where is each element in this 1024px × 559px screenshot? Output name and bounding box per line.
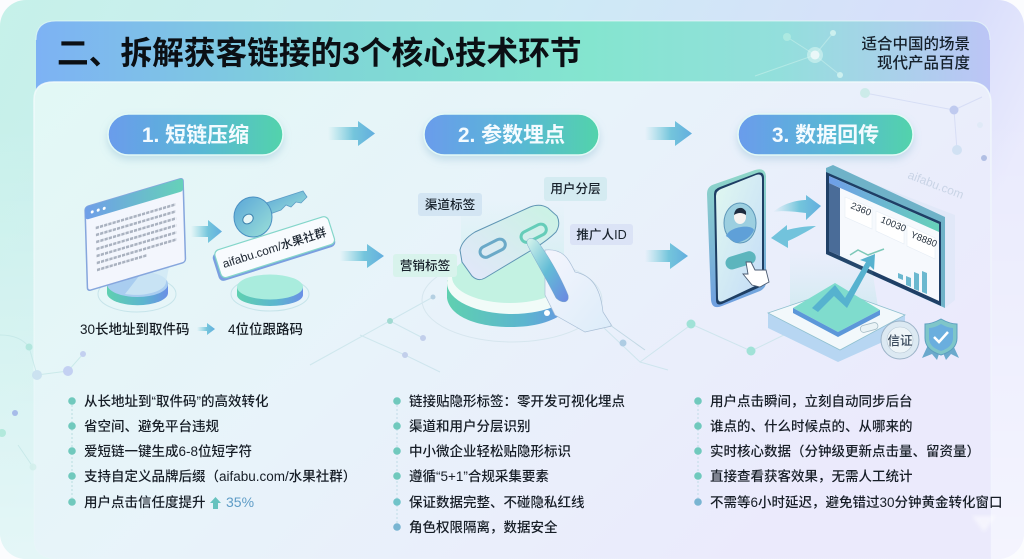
arrow: step 1 to step 2 illustration bbox=[340, 244, 384, 268]
step 1 pill bbox=[108, 114, 283, 155]
tag: channel bbox=[418, 193, 482, 216]
step 3 pill: 3. 数据回传 bbox=[772, 124, 879, 147]
bullet item 3: 中小微企业轻松贴隐形标识 bbox=[409, 443, 571, 459]
step 3 pill bbox=[738, 114, 913, 155]
icon: platform bbox=[422, 251, 602, 342]
list: column 3 bbox=[694, 393, 1003, 510]
tag: channel: 渠道标签 bbox=[425, 197, 476, 212]
bullet item 6: 角色权限隔离，数据安全 bbox=[409, 519, 558, 535]
main panel bbox=[34, 82, 991, 559]
bullet item 2: 省空间、避免平台违规 bbox=[84, 418, 219, 434]
bullet item 5: 不需等6小时延迟，避免错过30分钟黄金转化窗口 bbox=[710, 494, 1003, 510]
mini chart bbox=[850, 249, 927, 294]
hand cursor bbox=[743, 262, 769, 287]
illustration: parameter tagging bbox=[393, 177, 645, 350]
dashboard numbers bbox=[849, 201, 938, 250]
tag: user tier: 用户分层 bbox=[550, 181, 601, 196]
circuit lines across the middle bbox=[310, 294, 790, 372]
step 2 pill: 2. 参数埋点 bbox=[458, 123, 565, 147]
step 2 pill bbox=[424, 114, 599, 155]
small arrow bbox=[197, 323, 215, 335]
icon: short link pedestal bbox=[231, 274, 309, 311]
arrow 2 to 3 bbox=[645, 121, 692, 146]
icon: long url window bbox=[85, 178, 186, 291]
bullet item 5: 用户点击信任度提升 bbox=[84, 494, 206, 510]
light beam bbox=[461, 200, 564, 295]
icon: phone bbox=[707, 169, 769, 307]
title: 二、拆解获客链接的3个核心技术环节 bbox=[57, 35, 582, 71]
caption: long url to short code: 4位位跟路码 bbox=[228, 321, 303, 337]
bullet item 3: 爱短链一键生成6-8位短字符 bbox=[84, 443, 252, 459]
bullet item 2: 谁点的、什么时候点的、从哪来的 bbox=[710, 419, 912, 434]
arrow: step 2 to step 3 illustration bbox=[645, 243, 688, 269]
bullet item 4: 遵循“5+1”合规采集要素 bbox=[409, 468, 549, 484]
header note: 现代产品百度 bbox=[877, 54, 970, 72]
beam above base bbox=[790, 250, 880, 320]
dashboard numbers: 10030 bbox=[879, 215, 907, 235]
arrow 1 to 2 bbox=[328, 121, 375, 146]
icon: watermark diamond bbox=[972, 516, 996, 532]
bullet item 4: 直接查看获客效果，无需人工统计 bbox=[710, 468, 912, 484]
dashboard numbers: Y8880 bbox=[909, 230, 938, 250]
caption: long url to short code bbox=[80, 321, 303, 337]
step 1 pill: 1. 短链压缩 bbox=[142, 123, 249, 147]
icon: document pedestal bbox=[98, 252, 176, 312]
icon: trust stamp: 信证 bbox=[887, 333, 913, 348]
bullet item 1: 链接贴隐形标签：零开发可视化埋点 bbox=[409, 393, 625, 409]
header band bbox=[36, 21, 990, 110]
bullet item 4: 支持自定义品牌后缀（aifabu.com/水果社群） bbox=[84, 468, 356, 484]
button bbox=[724, 250, 757, 271]
watermark: aifabu.com bbox=[906, 168, 966, 202]
arrow: dashboard to phone bbox=[771, 225, 816, 248]
caption: long url to short code: 30长地址到取件码 bbox=[80, 322, 190, 337]
list: column 2 bbox=[393, 393, 625, 535]
tag: promoter id: 推广人ID bbox=[576, 227, 627, 242]
tag: marketing: 营销标签 bbox=[400, 258, 451, 273]
short link card bbox=[211, 215, 337, 282]
bullet item 5: 35% bbox=[226, 494, 254, 510]
bullet item 2: 渠道和用户分层识别 bbox=[409, 418, 530, 434]
short link card: aifabu.com/水果社群 bbox=[221, 225, 328, 271]
bullet item 1: 用户点击瞬间，立刻自动同步后台 bbox=[710, 393, 912, 409]
dashboard numbers: 2360 bbox=[849, 201, 873, 219]
bullet item 3: 实时核心数据（分钟级更新点击量、留资量） bbox=[710, 443, 980, 459]
icon: hand with pen bbox=[527, 239, 645, 350]
header note: 适合中国的场景 bbox=[861, 35, 970, 53]
icon: device base bbox=[768, 254, 905, 362]
list: column 1 bbox=[68, 393, 356, 510]
icon: key bbox=[234, 191, 307, 237]
bullet item 5 bbox=[68, 494, 254, 510]
icon: monitor bbox=[826, 165, 955, 308]
background network left bbox=[0, 335, 86, 470]
icon: shield bbox=[922, 319, 959, 360]
arrow: phone to dashboard bbox=[773, 195, 821, 220]
icon: trust stamp bbox=[881, 321, 919, 359]
illustration: short link compression bbox=[85, 178, 337, 312]
tag: promoter id bbox=[570, 224, 633, 245]
icon: up arrow bbox=[210, 497, 221, 509]
header note bbox=[861, 35, 970, 72]
avatar bbox=[724, 203, 756, 243]
icon: chain link plate bbox=[460, 205, 559, 280]
dashboard cards bbox=[845, 197, 935, 259]
illustration: data return bbox=[707, 165, 966, 362]
bullet item 5: 保证数据完整、不碰隐私红线 bbox=[409, 494, 585, 510]
header network decoration bbox=[755, 30, 843, 78]
arrow: window to key link bbox=[191, 220, 222, 243]
tag: marketing bbox=[393, 254, 457, 277]
panel network decoration right bbox=[860, 88, 987, 161]
tag: user tier bbox=[544, 177, 607, 201]
bullet item 1: 从长地址到“取件码”的高效转化 bbox=[84, 393, 269, 409]
